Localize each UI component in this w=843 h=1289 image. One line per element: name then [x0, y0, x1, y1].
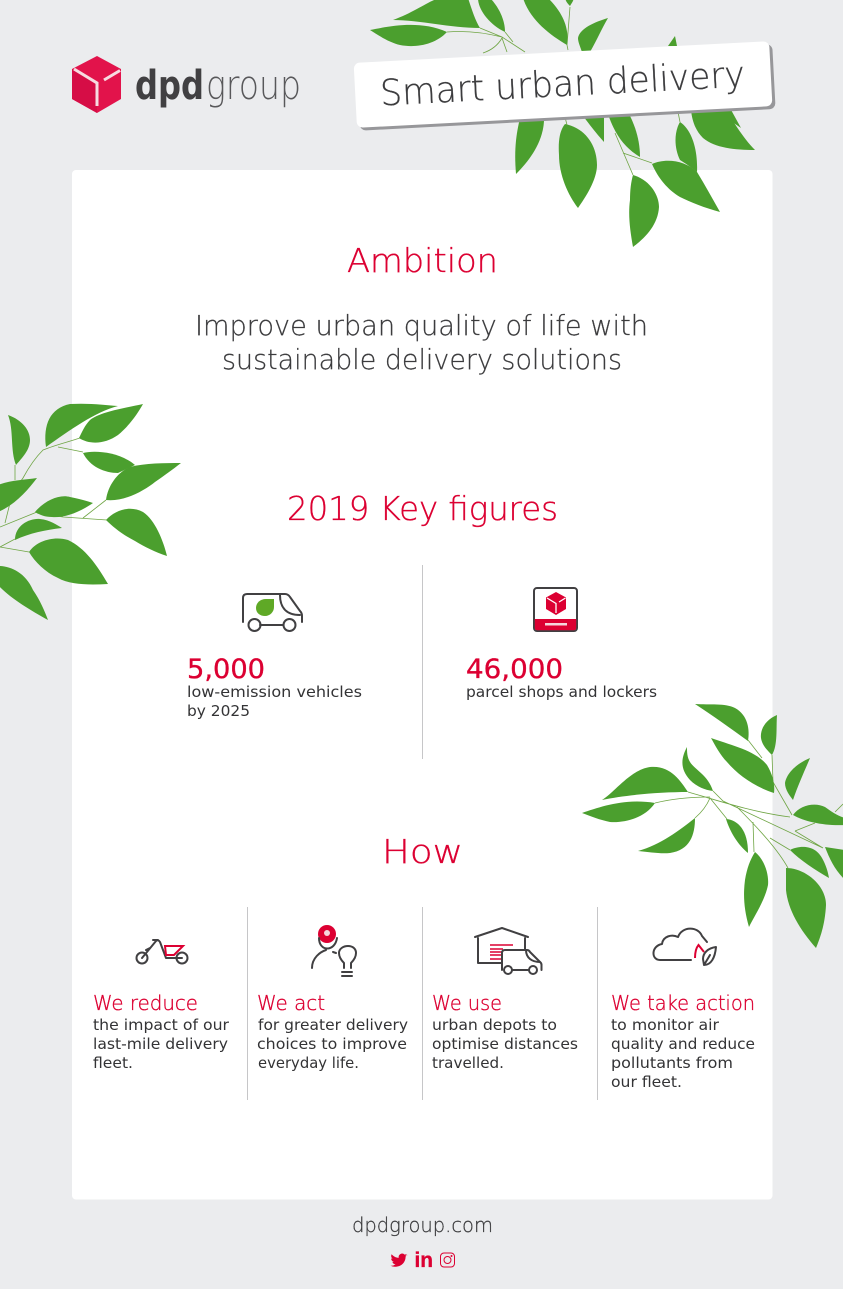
leaves: top branch	[370, 0, 755, 247]
column text: choices to improve	[257, 1035, 407, 1053]
column text: travelled.	[432, 1054, 504, 1072]
heading: We act: We act	[257, 991, 325, 1015]
icon: courier with light bulb	[312, 925, 356, 976]
figure: 46,000: 46,000	[466, 654, 563, 685]
logo wordmark: group	[206, 63, 301, 109]
heading: Ambition: Ambition	[347, 241, 498, 280]
column: We use	[432, 928, 578, 1072]
column text: fleet.	[93, 1054, 133, 1072]
title label: Smart urban delivery: Smart urban delivery	[379, 55, 746, 115]
heading: How: How	[382, 832, 463, 871]
icon: electric van with leaf	[243, 594, 302, 631]
column text: our fleet.	[611, 1073, 682, 1091]
ambition statement: Improve urban quality of life with	[195, 309, 648, 342]
panel: main white card	[72, 170, 772, 1200]
figure: 5,000: 5,000	[187, 654, 265, 685]
heading: 2019 Key figures: 2019 Key figures	[287, 489, 558, 528]
leaves: right branch	[582, 704, 843, 948]
icon: linkedin: in	[414, 1249, 433, 1272]
footer url: dpdgroup.com	[352, 1213, 493, 1237]
column text: quality and reduce	[611, 1035, 755, 1053]
figure caption	[187, 683, 362, 720]
column text: everyday life.	[258, 1054, 359, 1072]
column text	[611, 1016, 755, 1091]
column text	[257, 1016, 408, 1072]
column: We reduce	[93, 940, 230, 1072]
column text	[93, 1016, 230, 1072]
icon: cargo bike	[136, 940, 188, 964]
heading: We take action: We take action	[611, 991, 755, 1015]
leaves: left branch	[0, 404, 181, 620]
column text: to monitor air	[611, 1016, 720, 1034]
icon: red parcel cube	[72, 56, 121, 113]
heading: We reduce: We reduce	[93, 991, 198, 1015]
column text: urban depots to	[432, 1016, 557, 1034]
column text	[432, 1016, 578, 1072]
column dividers	[248, 907, 598, 1100]
icon: instagram	[440, 1253, 454, 1267]
icon: twitter	[390, 1254, 407, 1267]
column: We act	[257, 925, 408, 1072]
column text: last-mile delivery	[93, 1035, 228, 1053]
column text: for greater delivery	[258, 1016, 408, 1034]
column text: the impact of our	[93, 1016, 230, 1034]
figure caption: low-emission vehicles	[187, 683, 362, 701]
divider	[422, 565, 424, 759]
icon: urban depot and van	[475, 928, 542, 974]
ambition statement	[195, 309, 648, 376]
ambition statement: sustainable delivery solutions	[222, 343, 622, 376]
column: We take action	[611, 929, 755, 1091]
title label: Smart urban delivery	[354, 41, 776, 131]
logo: dpdgroup	[72, 56, 301, 113]
icon: parcel locker	[534, 588, 577, 631]
heading: We use: We use	[432, 991, 502, 1015]
column text: pollutants from	[611, 1054, 733, 1072]
figure caption: by 2025	[187, 702, 250, 720]
key figure: parcel shops	[466, 588, 657, 701]
column text: optimise distances	[432, 1035, 578, 1053]
icon: cloud with leaf	[653, 929, 716, 965]
social icons	[390, 1249, 454, 1272]
key figure: vehicles	[187, 594, 362, 720]
logo wordmark: dpd	[135, 63, 204, 109]
figure caption: parcel shops and lockers	[466, 683, 657, 701]
